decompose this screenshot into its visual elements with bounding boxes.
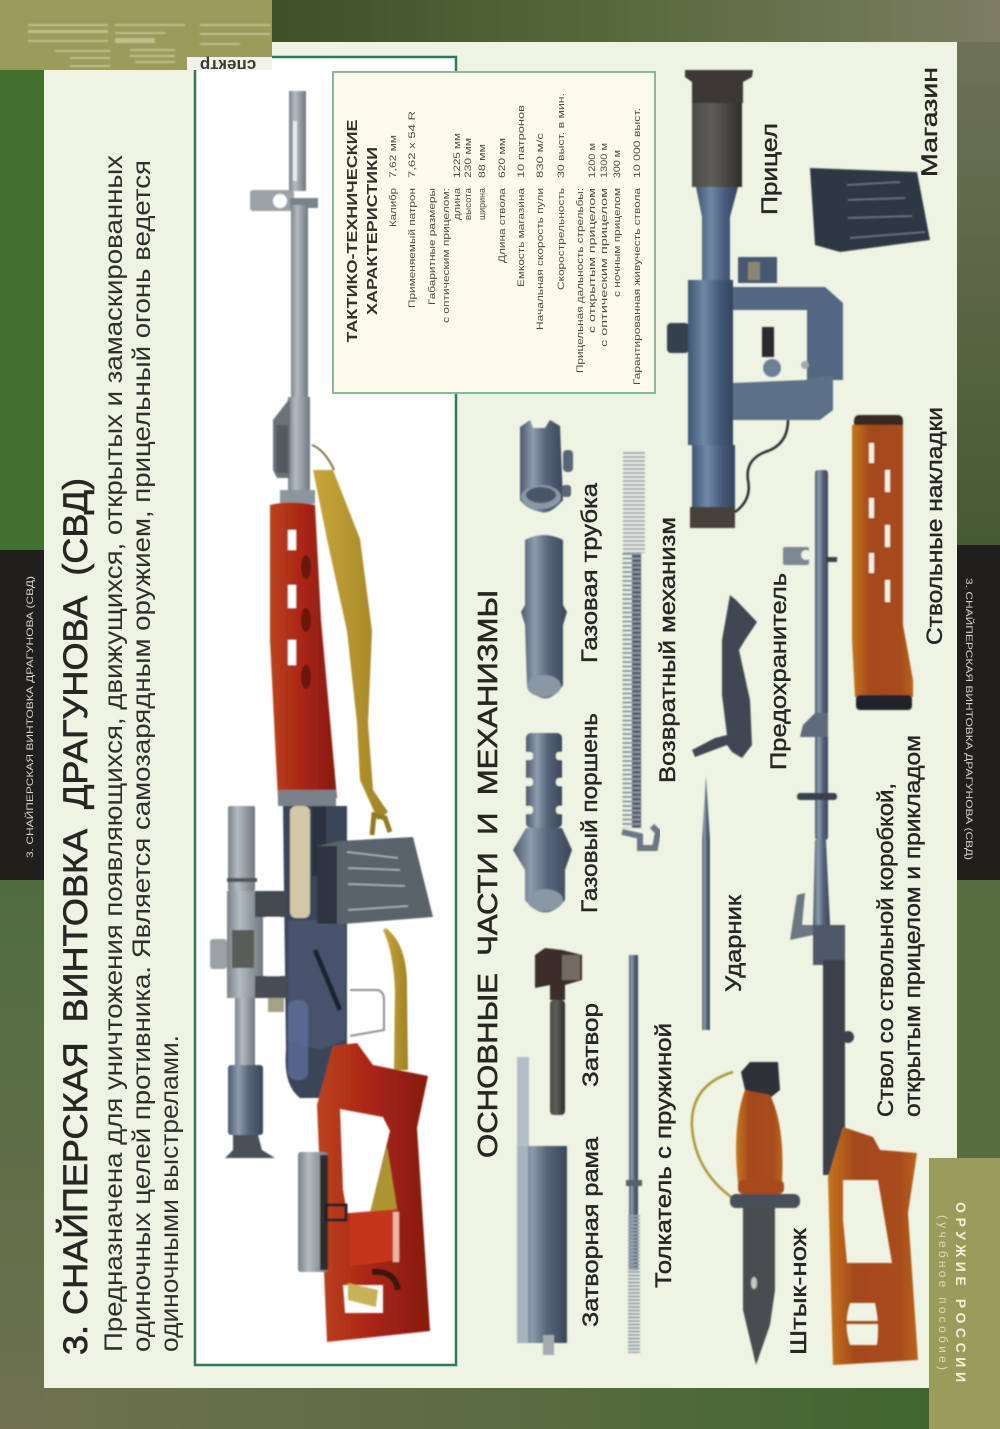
label: barrel with receiver and stock: Ствол со ствольной коробкой, [873, 783, 898, 1117]
part: safety lever [692, 573, 791, 770]
part: bolt [535, 948, 603, 1115]
part: gas tube [520, 420, 602, 698]
rifle cheek piece [298, 1152, 346, 1272]
description text [100, 154, 184, 1352]
part: pusher with spring [626, 955, 676, 1353]
description text: одиночных целей противника. Является самозарядным оружием, прицельный огонь ведется [128, 160, 156, 1352]
table rows: с ночным прицелом [612, 188, 623, 297]
table rows: 830 м/с [535, 133, 546, 178]
part: striker [702, 776, 746, 1030]
table rows: Скорострельность [556, 188, 567, 290]
side tab: left black label: 3. СНАЙПЕРСКАЯ ВИНТОВКА ДРАГУНОВА (СВД) [24, 576, 35, 858]
specifications table [333, 72, 655, 393]
part: return mechanism [622, 452, 680, 848]
publisher block top left [0, 0, 272, 75]
part: gas piston [513, 713, 602, 913]
label: barrel handguards: Ствольные накладки [922, 407, 947, 645]
main title: 3. СНАЙПЕРСКАЯ ВИНТОВКА ДРАГУНОВА (СВД) [57, 478, 95, 1355]
part: bolt carrier [517, 1057, 603, 1355]
table rows: с открытым прицелом [587, 188, 598, 333]
table rows: высота [463, 187, 474, 220]
table rows: 10 патронов [516, 105, 527, 178]
part: bayonet [692, 1062, 811, 1365]
label: bayonet: Штык-нож [786, 1228, 811, 1355]
label: bolt carrier: Затворная рама [578, 1136, 603, 1327]
table rows: 300 м [612, 150, 623, 178]
rifle handguard [270, 502, 337, 800]
rifle barrel and sight [250, 91, 318, 504]
table rows [388, 93, 643, 385]
table rows: длина [452, 187, 463, 220]
side tab: right black label: 3. СНАЙПЕРСКАЯ ВИНТОВКА ДРАГУНОВА (СВД) [964, 578, 975, 860]
rifle magazine [317, 837, 433, 925]
table rows: Прицельная дальность стрельбы: [575, 188, 586, 373]
label: bolt: Затвор [578, 1003, 603, 1087]
part: optical sight [667, 70, 843, 528]
rifle stock [317, 1043, 430, 1342]
rifle photo frame [195, 57, 456, 1365]
label: optical sight: Прицел [757, 123, 782, 215]
label: return mechanism: Возвратный механизм [655, 517, 680, 783]
side tab: left black label [0, 550, 44, 880]
label: barrel with receiver and stock [873, 735, 925, 1117]
label: pusher with spring: Толкатель с пружиной [651, 1023, 676, 1288]
table heading: ТАКТИКО-ТЕХНИЧЕСКИЕ [344, 120, 361, 342]
table rows: 230 мм [463, 138, 474, 178]
table rows: Гарантированная живучесть ствола [632, 187, 643, 385]
part: magazine [810, 67, 942, 252]
table rows: с оптическим прицелом [599, 188, 610, 347]
part: barrel with receiver and stock [783, 470, 925, 1365]
table rows: 30 выст. в мин. [556, 93, 567, 178]
table rows: с оптическим прицелом: [441, 188, 452, 323]
label: barrel with receiver and stock: открытым прицелом и прикладом [900, 735, 925, 1117]
description text: Предназначена для уничтожения появляющихся, движущихся, открытых и замаскированных [100, 154, 128, 1352]
publisher block top left: спектр [200, 56, 256, 75]
table rows: 10 000 выст. [632, 108, 643, 178]
label: magazine: Магазин [917, 67, 942, 177]
table rows: 620 мм [497, 138, 508, 178]
table rows: Емкость магазина [516, 187, 527, 287]
table rows: 7,62 х 54 R [407, 111, 418, 178]
rifle optical sight [210, 806, 287, 1158]
table rows: Начальная скорость пули [535, 188, 546, 330]
rifle trigger guard [350, 990, 384, 1036]
table rows: Габаритные размеры [427, 188, 438, 305]
label: gas tube: Газовая трубка [577, 482, 602, 663]
table rows: 1300 м [599, 143, 610, 178]
label: gas piston: Газовый поршень [577, 713, 602, 913]
table rows: 88 мм [477, 144, 488, 178]
table heading [344, 120, 381, 342]
side tab: right black label [957, 545, 1000, 880]
label: safety lever: Предохранитель [766, 573, 791, 770]
title block bottom right: ОРУЖИЕ РОССИИ [953, 1202, 969, 1382]
rifle sling [312, 445, 408, 1070]
table rows: Применяемый патрон [407, 188, 418, 308]
table rows: ширина [477, 187, 488, 220]
rifle receiver [278, 790, 347, 1098]
table rows: 7,62 мм [388, 135, 399, 178]
description text: одиночными выстрелами. [156, 1035, 184, 1352]
part: barrel handguards [852, 407, 947, 710]
table rows: 1200 м [587, 143, 598, 178]
table heading: ХАРАКТЕРИСТИКИ [364, 147, 381, 315]
main rifle SVD assembled [210, 91, 433, 1342]
table rows: Калибр [388, 188, 399, 227]
table rows: 1225 мм [452, 133, 463, 178]
title block bottom right: (учебное пособие) [936, 1215, 950, 1370]
table rows: Длина ствола [497, 187, 508, 263]
title block bottom right [929, 1158, 1000, 1429]
parts heading: ОСНОВНЫЕ ЧАСТИ И МЕХАНИЗМЫ [472, 590, 503, 1158]
label: striker: Ударник [721, 895, 746, 992]
